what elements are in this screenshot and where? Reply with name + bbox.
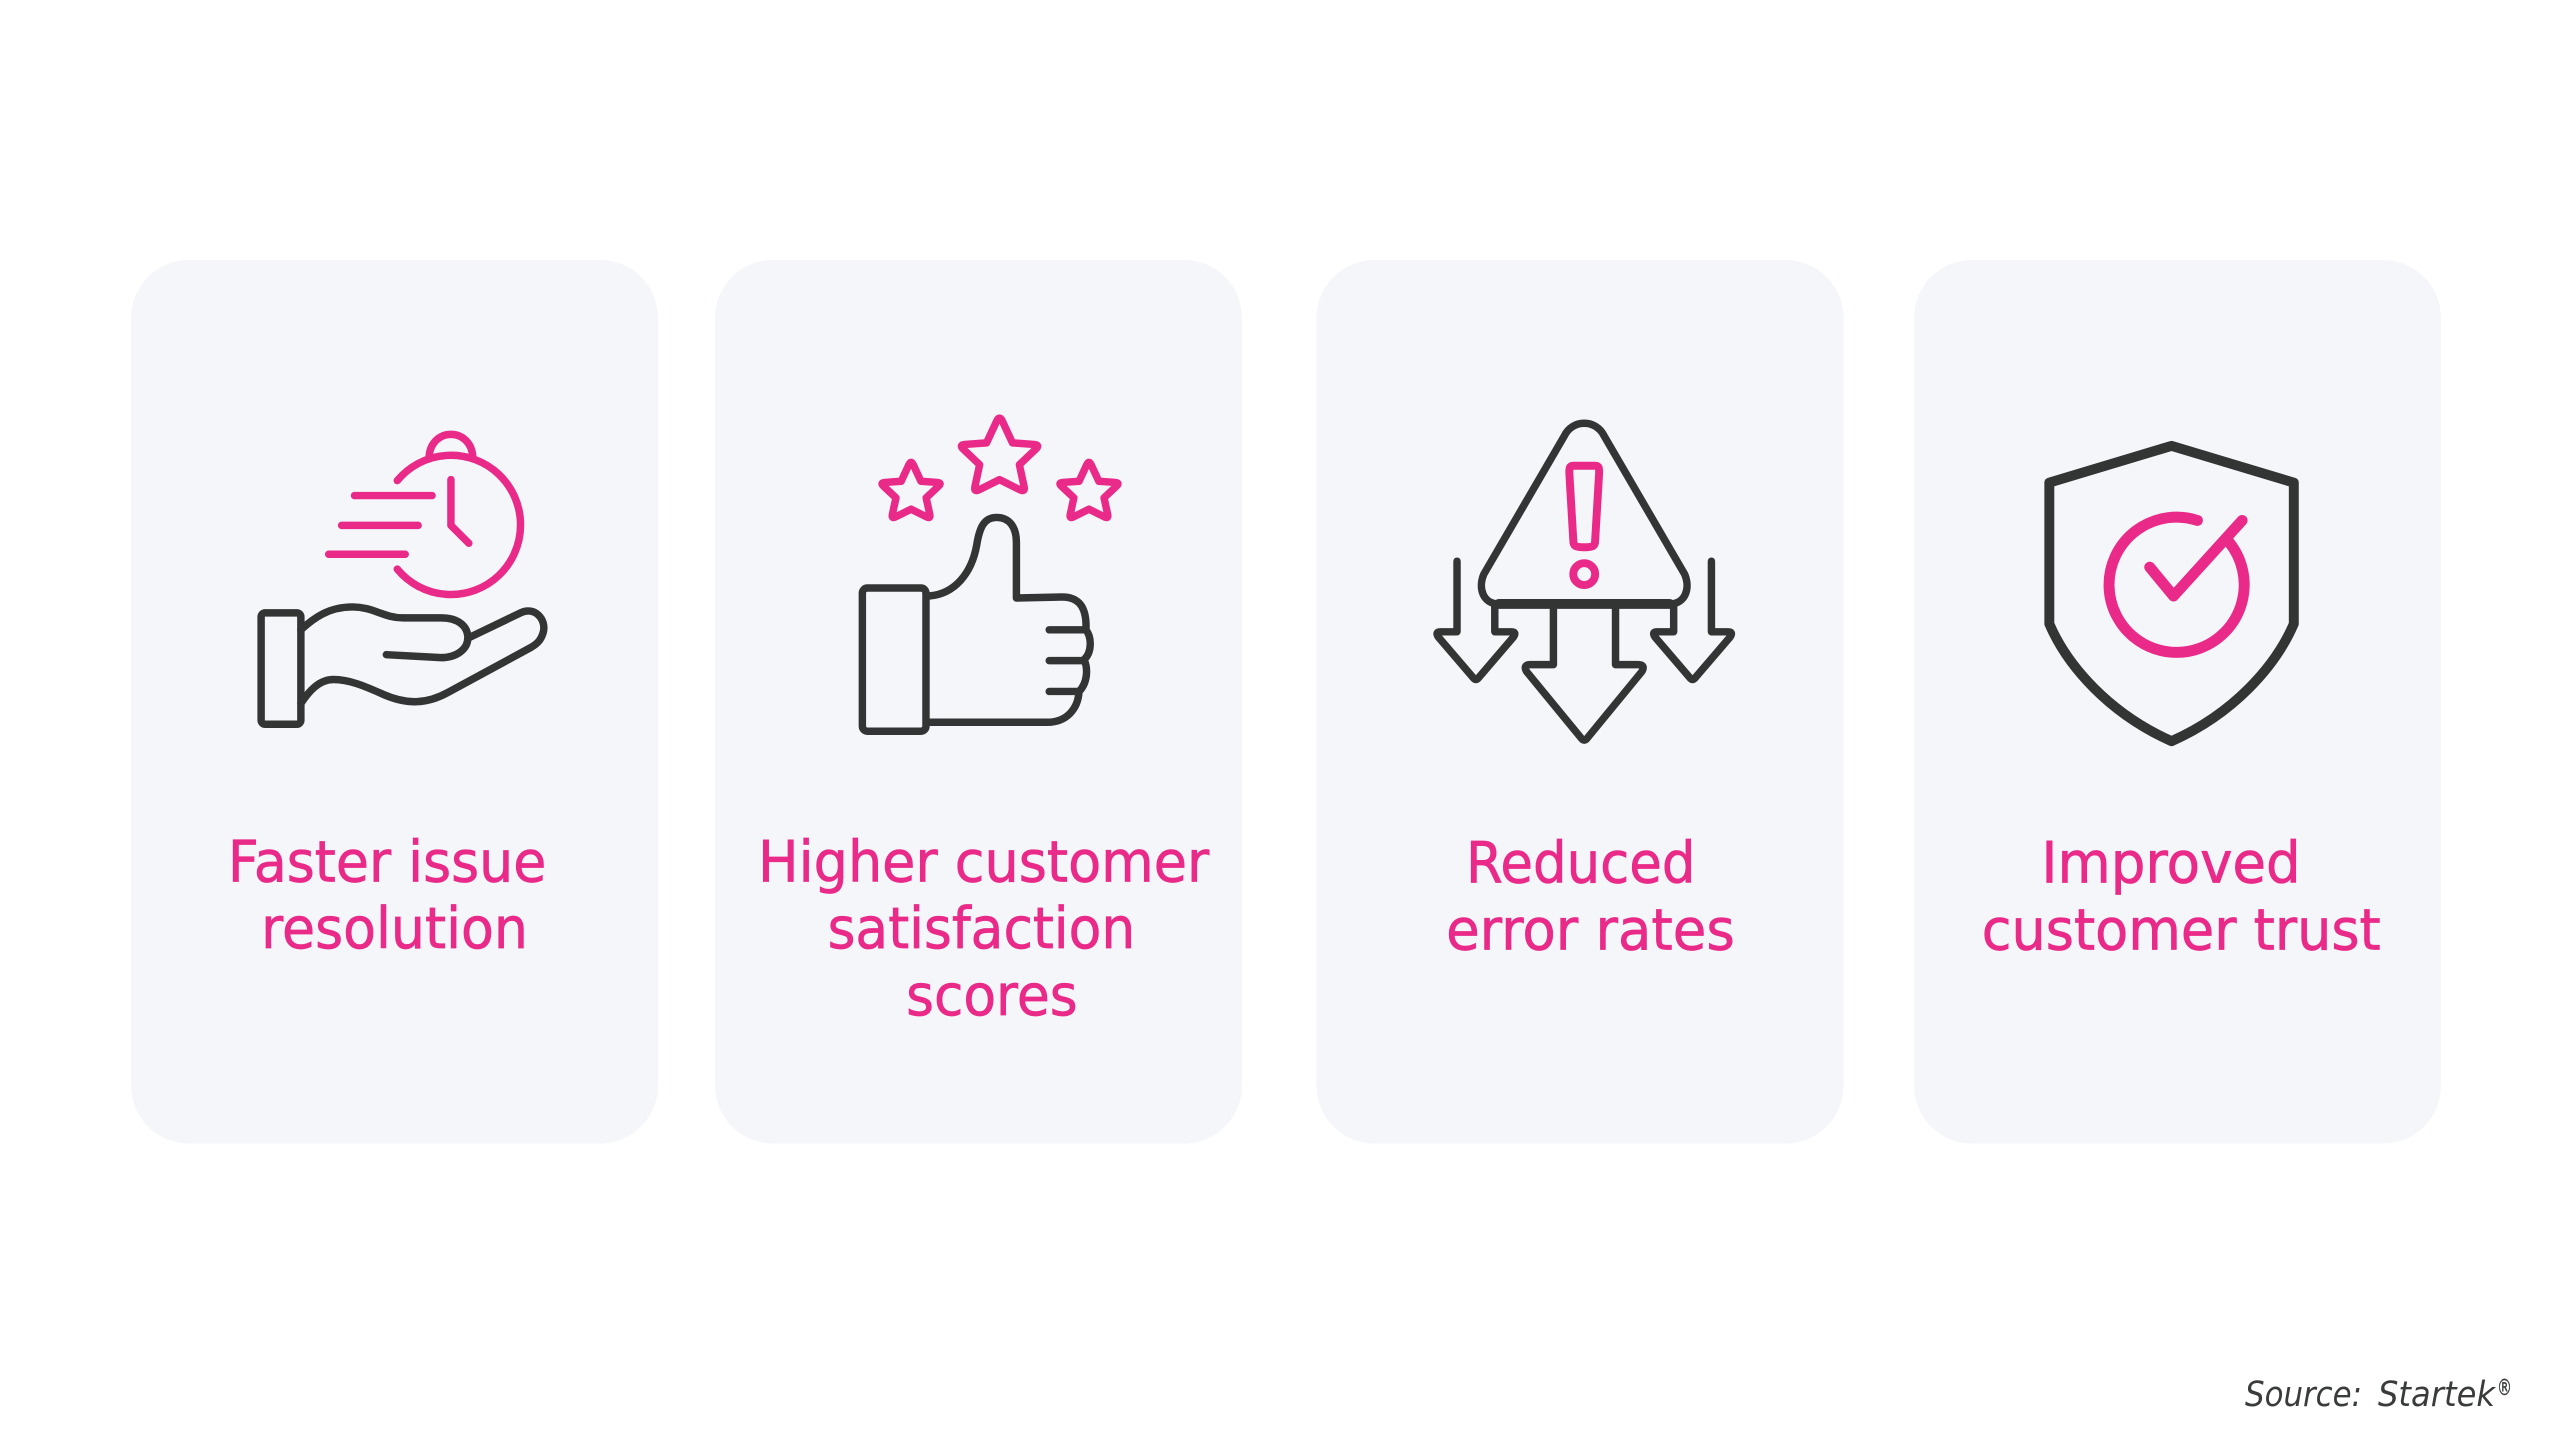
label: higher customer satisfaction scores: Higher customer xyxy=(758,829,1210,895)
panel: reduced error rates xyxy=(1316,260,1844,1144)
icon: shield with check mark xyxy=(2049,446,2294,741)
card background xyxy=(715,260,1242,1144)
icon: stopwatch on open hand xyxy=(261,434,544,724)
exclamation mark xyxy=(1569,466,1599,585)
card background xyxy=(131,260,658,1144)
check circle xyxy=(2109,517,2244,652)
shield xyxy=(2049,446,2294,741)
down arrows xyxy=(1437,561,1731,740)
label: improved customer trust: Improved xyxy=(2041,830,2301,896)
thumbs up hand xyxy=(862,517,1090,731)
label: improved customer trust xyxy=(1982,830,2381,964)
open hand xyxy=(261,607,544,724)
label: faster issue resolution: Faster issue xyxy=(228,829,546,895)
source note: ® xyxy=(2497,1376,2512,1401)
icon: thumbs up with three stars xyxy=(862,418,1118,731)
stopwatch xyxy=(329,434,521,595)
panel: improved customer trust xyxy=(1914,260,2441,1144)
label: reduced error rates: Reduced xyxy=(1466,830,1696,896)
label: reduced error rates: error rates xyxy=(1446,897,1735,964)
warning triangle xyxy=(1481,423,1687,604)
panel: higher customer satisfaction scores xyxy=(715,260,1242,1144)
panel: faster issue resolution xyxy=(131,260,658,1144)
label: higher customer satisfaction scores: scores xyxy=(906,963,1078,1029)
label: improved customer trust: customer trust xyxy=(1982,897,2381,964)
icon: warning triangle with down arrows xyxy=(1437,423,1731,740)
label: reduced error rates xyxy=(1446,830,1735,964)
card background xyxy=(1316,260,1844,1144)
label: faster issue resolution: resolution xyxy=(261,896,528,962)
source note: Startek xyxy=(2378,1375,2497,1415)
three stars xyxy=(882,418,1118,518)
label: higher customer satisfaction scores xyxy=(758,829,1210,1029)
label: higher customer satisfaction scores: satisfaction xyxy=(828,896,1135,962)
source note: Source: xyxy=(2245,1375,2362,1415)
source note xyxy=(2245,1375,2512,1415)
label: faster issue resolution xyxy=(228,829,546,962)
card background xyxy=(1914,260,2441,1144)
